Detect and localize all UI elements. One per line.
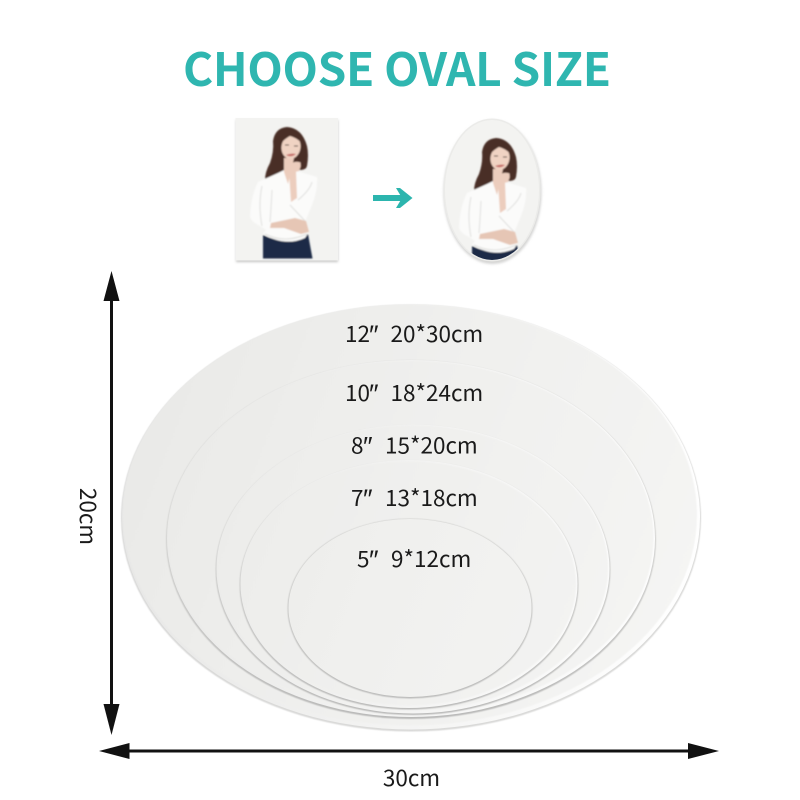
title: CHOOSE OVAL SIZE <box>183 34 611 100</box>
size label 10 inch: 10 <box>345 376 370 408</box>
size label 7 inch: 7 <box>351 481 364 513</box>
size label 7 inch: ″ <box>363 484 373 514</box>
vertical dimension arrow <box>104 271 120 735</box>
arrow: rectangle to oval <box>373 188 412 208</box>
oval plate 12 inch <box>121 304 701 732</box>
size label 5 inch: 5 <box>357 542 370 574</box>
rectangular source photo <box>236 118 338 262</box>
horizontal dimension arrow <box>99 743 719 759</box>
width label: 30cm <box>383 761 440 793</box>
size label 10 inch: 18*24cm <box>390 376 483 408</box>
oval plate 7 inch <box>240 460 578 710</box>
size label 12 inch: ″ <box>369 320 379 350</box>
size label 8 inch: 15*20cm <box>385 428 478 460</box>
size label 10 inch: ″ <box>369 379 379 409</box>
size label 5 inch: ″ <box>369 545 379 575</box>
size label 8 inch: 8 <box>351 428 364 460</box>
oval plate 10 inch <box>166 360 656 719</box>
size label 12 inch: 12 <box>345 317 370 349</box>
oval plate 8 inch <box>216 424 610 715</box>
oval plate 5 inch <box>288 518 532 698</box>
nested oval plates <box>121 304 701 732</box>
size label 7 inch: 13*18cm <box>385 481 478 513</box>
height label: 20cm <box>73 488 105 545</box>
size label 5 inch: 9*12cm <box>391 542 471 574</box>
oval result photo <box>444 118 542 270</box>
size label 8 inch: ″ <box>363 432 373 462</box>
size label 12 inch: 20*30cm <box>390 317 483 349</box>
